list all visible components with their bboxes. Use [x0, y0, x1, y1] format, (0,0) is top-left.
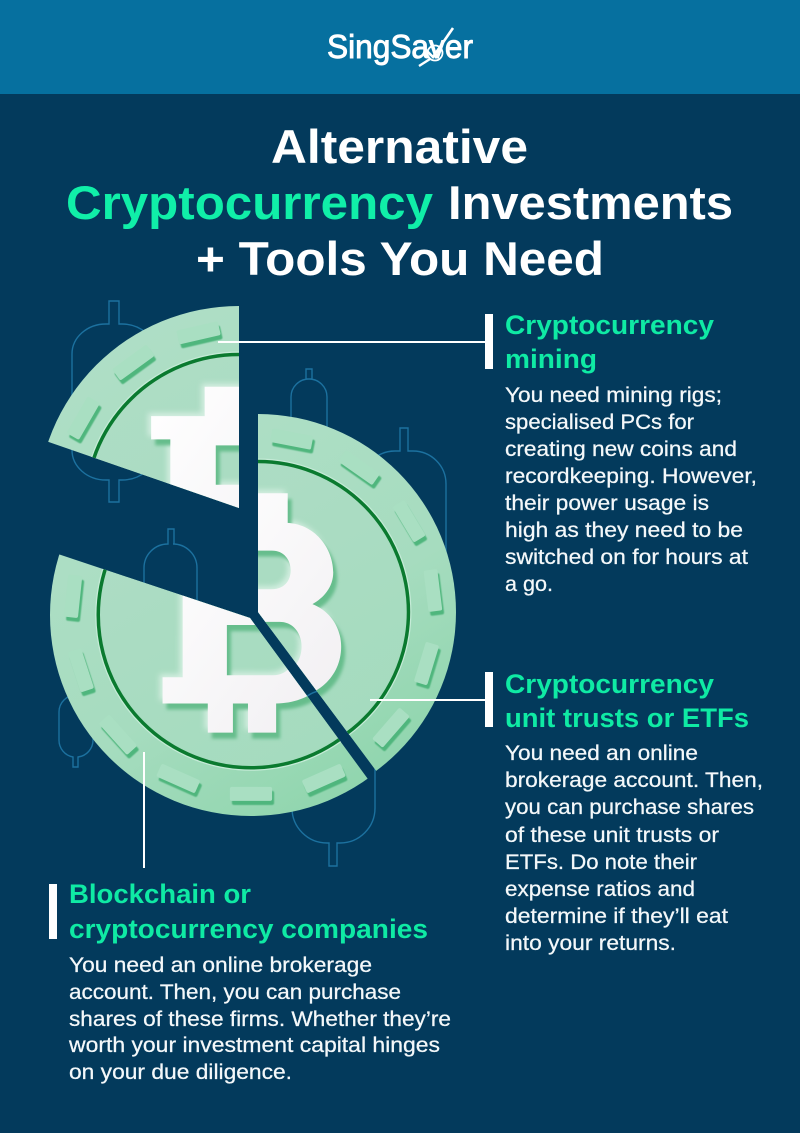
- heading: unit trusts or ETFs: unit trusts or ETFs: [505, 703, 749, 733]
- coin slice: right: [258, 414, 456, 771]
- panel: cryptocurrency mining: [485, 310, 757, 596]
- body text: unit trusts or ETFs: determine if they’ll eat: [505, 905, 728, 928]
- body text: blockchain or cryptocurrency companies: shares of these firms. Whether they’re: [69, 1008, 451, 1031]
- body text: cryptocurrency mining: [505, 384, 757, 596]
- background candlestick outlines: [59, 301, 446, 866]
- heading: unit trusts or ETFs: Cryptocurrency: [505, 669, 714, 699]
- heading: cryptocurrency mining: mining: [505, 344, 597, 374]
- connector line: ETFs: [370, 699, 485, 701]
- heading: blockchain or cryptocurrency companies: cryptocurrency companies: [69, 914, 428, 944]
- coin slice: bottom left: [50, 554, 368, 816]
- title: Alternative: [271, 120, 528, 173]
- body text: blockchain or cryptocurrency companies: worth your investment capital hinges: [68, 1034, 440, 1057]
- heading: blockchain or cryptocurrency companies: [69, 879, 428, 944]
- body text: cryptocurrency mining: recordkeeping. However,: [505, 465, 757, 488]
- connector line: companies: [143, 752, 145, 868]
- body text: blockchain or cryptocurrency companies: [68, 954, 451, 1084]
- body text: blockchain or cryptocurrency companies: You need an online brokerage: [69, 954, 372, 977]
- body text: cryptocurrency mining: a go.: [505, 573, 553, 596]
- body text: unit trusts or ETFs: of these unit trusts or: [505, 824, 719, 847]
- split bitcoin coin: [37, 306, 456, 816]
- body text: unit trusts or ETFs: into your returns.: [505, 932, 676, 955]
- body text: blockchain or cryptocurrency companies: on your due diligence.: [69, 1061, 292, 1084]
- header band: [0, 0, 800, 94]
- body text: cryptocurrency mining: You need mining rigs;: [505, 384, 722, 407]
- panel: unit trusts or ETFs: [485, 669, 763, 955]
- coin slice: top left: [48, 306, 239, 508]
- body text: cryptocurrency mining: creating new coins and: [505, 438, 737, 461]
- title: Cryptocurrency: [66, 176, 433, 229]
- body text: blockchain or cryptocurrency companies: account. Then, you can purchase: [69, 981, 401, 1004]
- panel: blockchain or cryptocurrency companies: [49, 879, 451, 1084]
- body text: unit trusts or ETFs: ETFs. Do note their: [505, 851, 697, 874]
- heading: cryptocurrency mining: Cryptocurrency: [505, 310, 714, 340]
- body text: cryptocurrency mining: specialised PCs for: [505, 411, 694, 434]
- title: + Tools You Need: [196, 232, 604, 285]
- title: [66, 120, 733, 285]
- title: Investments: [448, 176, 733, 229]
- connector line: mining: [218, 341, 485, 343]
- body text: unit trusts or ETFs: expense ratios and: [505, 878, 695, 901]
- body text: cryptocurrency mining: high as they need to be: [505, 519, 743, 542]
- body text: unit trusts or ETFs: brokerage account. Then,: [505, 769, 763, 792]
- body text: unit trusts or ETFs: [505, 742, 763, 955]
- body text: cryptocurrency mining: their power usage is: [505, 492, 709, 515]
- heading: cryptocurrency mining: [505, 310, 714, 374]
- SingSaver logo: SingSaver: [327, 28, 473, 65]
- body text: unit trusts or ETFs: you can purchase shares: [505, 796, 754, 819]
- heading: blockchain or cryptocurrency companies: Blockchain or: [69, 879, 252, 909]
- body text: unit trusts or ETFs: You need an online: [505, 742, 698, 765]
- body text: cryptocurrency mining: switched on for hours at: [505, 546, 748, 569]
- heading: unit trusts or ETFs: [505, 669, 749, 733]
